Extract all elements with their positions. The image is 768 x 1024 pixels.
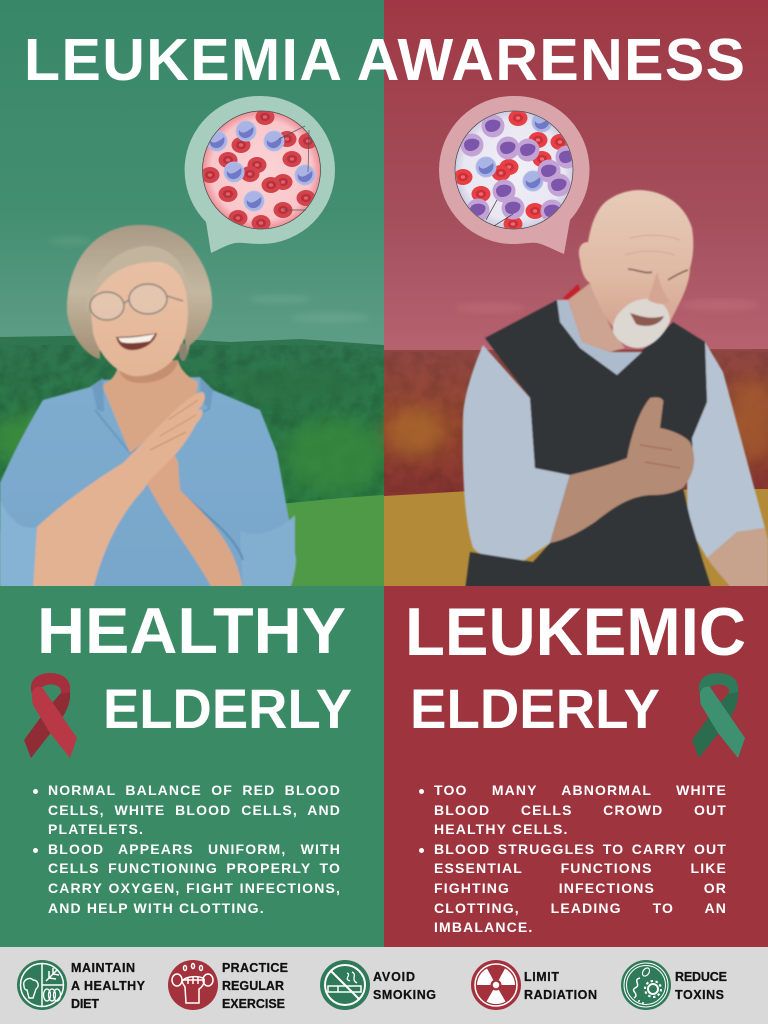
background: leukemic landscape	[384, 0, 768, 586]
tip text	[373, 970, 436, 1002]
head	[579, 190, 693, 340]
face	[90, 257, 188, 376]
photo: smiling healthy elderly woman	[0, 225, 296, 590]
text block: healthy blood facts: CELLS FUNCTIONING PROPERLY TO	[48, 860, 341, 876]
text block: leukemic blood facts: HEALTHY CELLS.	[434, 821, 569, 837]
tip text	[71, 961, 146, 1011]
beard	[613, 299, 670, 348]
neck and chest	[102, 360, 198, 453]
icon: green ribbon	[692, 673, 745, 758]
tip text: REGULAR	[222, 979, 284, 993]
text block: leukemic blood facts: TOO MANY ABNORMAL WHITE	[434, 782, 727, 798]
tip text: RADIATION	[524, 988, 597, 1002]
shirt	[0, 377, 296, 590]
neck	[568, 283, 625, 352]
heading: leukemic: LEUKEMIC	[405, 594, 746, 670]
tip text: PRACTICE	[222, 961, 288, 975]
text block: healthy blood facts: NORMAL BALANCE OF RED BLOOD	[48, 782, 341, 798]
left forearm and hands	[33, 392, 205, 590]
red collar	[563, 284, 584, 310]
heading: elderly: ELDERLY	[103, 677, 352, 740]
tip text: EXERCISE	[222, 997, 285, 1011]
text block: leukemic blood facts	[419, 782, 727, 935]
glasses	[90, 284, 167, 320]
tip text	[524, 970, 597, 1002]
tip: regular exercise	[168, 960, 288, 1011]
shirt collar	[557, 300, 642, 375]
tip text: TOXINS	[675, 988, 724, 1002]
text block: healthy blood facts	[33, 782, 341, 916]
tip text: A HEALTHY	[71, 979, 146, 993]
tip text	[222, 961, 288, 1011]
title: LEUKEMIA AWARENESS	[24, 27, 745, 93]
text block: leukemic blood facts: ESSENTIAL FUNCTIONS LIKE	[434, 860, 727, 876]
panel: leukemic	[384, 586, 768, 947]
tip: healthy diet	[17, 960, 146, 1011]
heading: elderly: ELDERLY	[410, 677, 660, 740]
tip text: AVOID	[373, 970, 415, 984]
collar	[92, 377, 213, 412]
text block: leukemic blood facts: BLOOD STRUGGLES TO CARRY OUT	[434, 841, 727, 857]
smile	[116, 333, 157, 350]
heading: healthy: HEALTHY	[37, 594, 346, 667]
text block: healthy blood facts: PLATELETS.	[48, 821, 144, 837]
text block: healthy blood facts: AND HELP WITH CLOTTING.	[48, 900, 265, 916]
text block: healthy blood facts: CARRY OXYGEN, FIGHT INFECTIONS,	[48, 880, 341, 896]
tip text: SMOKING	[373, 988, 436, 1002]
tip: reduce toxins	[621, 960, 727, 1010]
hair back	[67, 225, 212, 359]
tip: avoid smoking	[320, 960, 436, 1010]
footer bar	[0, 947, 768, 1024]
icon: red ribbon	[24, 673, 77, 758]
bubble: leukemic blood cells	[439, 96, 589, 254]
left sleeve	[463, 345, 570, 563]
panel: healthy	[0, 586, 384, 947]
text block: leukemic blood facts: IMBALANCE.	[434, 919, 533, 935]
text block: leukemic blood facts: CLOTTING, LEADING TO AN	[434, 900, 727, 916]
fringe	[86, 246, 190, 312]
right forearm	[707, 528, 768, 590]
background: healthy landscape	[0, 0, 385, 586]
text block: healthy blood facts: BLOOD APPEARS UNIFORM, WITH	[48, 841, 341, 857]
vest	[465, 300, 712, 590]
tip text: REDUCE	[675, 970, 727, 984]
tip text	[675, 970, 727, 1002]
right sleeve	[687, 342, 765, 558]
earring	[179, 343, 187, 361]
eyes and nose	[628, 269, 688, 280]
bubble: healthy blood cells	[185, 96, 335, 253]
hand on chest	[550, 397, 694, 543]
text block: leukemic blood facts: FIGHTING INFECTIONS OR	[434, 880, 727, 896]
tip text: MAINTAIN	[71, 961, 135, 975]
right forearm	[147, 450, 243, 590]
tip text: LIMIT	[524, 970, 559, 984]
text block: healthy blood facts: CELLS, WHITE BLOOD CELLS, AND	[48, 802, 341, 818]
tip text: DIET	[71, 997, 99, 1011]
text block: leukemic blood facts: BLOOD CELLS CROWD OUT	[434, 802, 727, 818]
photo: elderly man holding chest	[463, 190, 768, 590]
tip: limit radiation	[471, 960, 597, 1010]
